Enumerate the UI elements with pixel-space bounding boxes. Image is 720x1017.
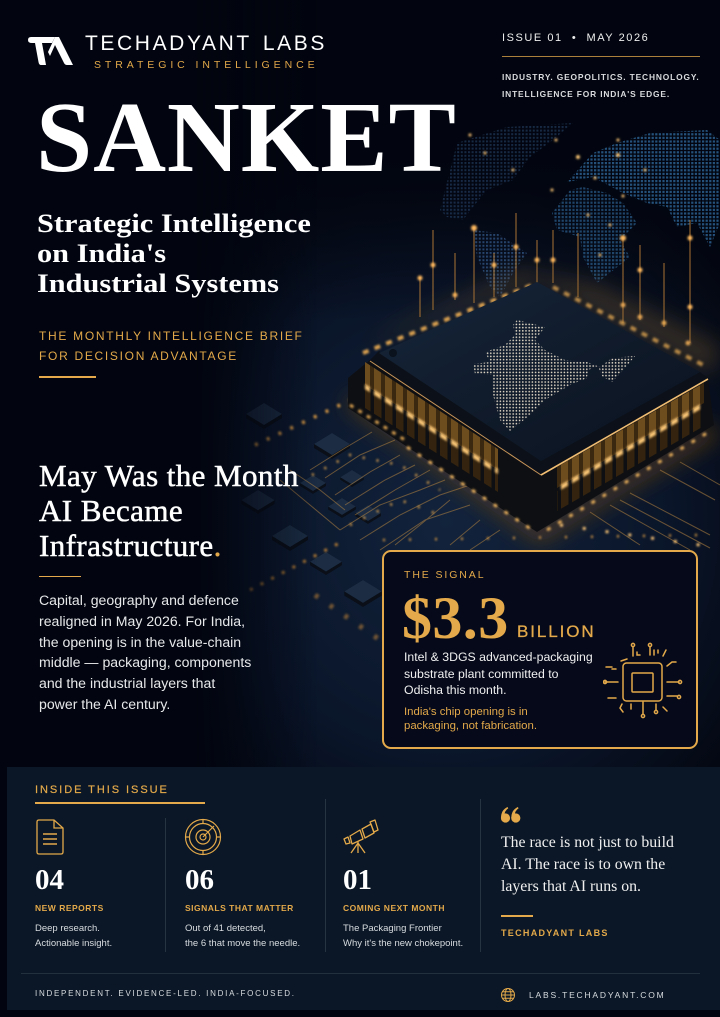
signal takeaway	[404, 706, 537, 732]
intro paragraph: middle — packaging, components	[39, 654, 251, 670]
signal description: substrate plant committed to	[404, 667, 558, 681]
icon: radar	[184, 818, 222, 856]
quote text	[501, 834, 674, 895]
signal value: $3.3	[402, 585, 509, 651]
number: 04	[35, 864, 64, 896]
signal description	[404, 650, 593, 697]
signal takeaway: India's chip opening is in	[404, 706, 528, 718]
description	[343, 923, 463, 949]
left fade	[0, 0, 720, 767]
signal description: Intel & 3DGS advanced-packaging	[404, 650, 593, 664]
issue descriptor: INTELLIGENCE FOR INDIA'S EDGE.	[502, 89, 670, 99]
brand name: TECHADYANT LABS	[85, 32, 327, 55]
icon: document	[36, 819, 64, 855]
intro paragraph: the opening is in the value-chain	[39, 634, 241, 650]
description	[35, 923, 112, 949]
lower pad rows	[350, 405, 707, 533]
quote text: The race is not just to build	[501, 834, 674, 851]
India dot map	[473, 320, 635, 431]
stat: new reports	[35, 864, 112, 949]
description: Out of 41 detected,	[185, 923, 266, 934]
label: NEW REPORTS	[35, 903, 104, 913]
quote attribution: TECHADYANT LABS	[501, 928, 609, 938]
strapline: THE MONTHLY INTELLIGENCE BRIEF	[39, 329, 304, 343]
solder highlights on board	[250, 398, 700, 640]
lid	[370, 351, 708, 475]
signal unit: BILLION	[517, 622, 596, 641]
panel: the signal	[382, 550, 698, 749]
hero illustration: world map, chip and circuit board	[186, 123, 720, 1001]
quote text: layers that AI runs on.	[501, 878, 641, 895]
description: the 6 that move the needle.	[185, 938, 300, 949]
intro paragraph	[39, 592, 251, 712]
icon: telescope	[343, 819, 379, 854]
stat: signals that matter	[185, 864, 300, 949]
warm bokeh glow around chip	[350, 270, 720, 535]
description: The Packaging Frontier	[343, 923, 442, 934]
description: Actionable insight.	[35, 938, 112, 949]
strapline	[39, 329, 304, 363]
icon: quote mark	[500, 807, 520, 823]
description: Deep research.	[35, 923, 100, 934]
strapline: FOR DECISION ADVANTAGE	[39, 349, 238, 363]
signal takeaway: packaging, not fabrication.	[404, 720, 537, 732]
glowing vertical signal beams	[418, 213, 692, 346]
pin columns	[365, 388, 704, 511]
description: Why it's the new chokepoint.	[343, 938, 463, 949]
label: SIGNALS THAT MATTER	[185, 903, 294, 913]
main headline: Infrastructure.	[39, 528, 222, 563]
circuit traces	[280, 432, 720, 550]
issue descriptor: INDUSTRY. GEOPOLITICS. TECHNOLOGY.	[502, 72, 700, 82]
intro paragraph: and the industrial layers that	[39, 675, 215, 691]
main headline: May Was the Month	[39, 458, 299, 493]
processor chip	[348, 282, 714, 533]
icon: chip	[603, 642, 682, 718]
label: COMING NEXT MONTH	[343, 903, 445, 913]
package body	[348, 360, 714, 532]
subtitle: Strategic Intelligence	[37, 208, 311, 238]
footer tagline: INDEPENDENT. EVIDENCE-LED. INDIA-FOCUSED.	[35, 989, 296, 998]
number: 06	[185, 864, 214, 896]
main headline	[39, 458, 299, 563]
outer pads	[363, 283, 707, 367]
logo mark	[28, 37, 73, 65]
section heading: INSIDE THIS ISSUE	[35, 784, 169, 796]
panel: inside this issue	[7, 767, 720, 1010]
issue descriptor	[502, 72, 700, 99]
icon: globe	[501, 988, 515, 1002]
description	[185, 923, 300, 949]
stat: coming next month	[343, 864, 463, 949]
signal description: Odisha this month.	[404, 683, 507, 697]
masthead title: SANKET	[36, 81, 457, 193]
intro paragraph: power the AI century.	[39, 696, 170, 712]
world map	[440, 123, 720, 297]
issue line: ISSUE 01 • MAY 2026	[502, 32, 649, 44]
glowing pin tops	[365, 384, 704, 492]
intro paragraph: realigned in May 2026. For India,	[39, 613, 245, 629]
subtitle: Industrial Systems	[37, 268, 279, 298]
intro paragraph: Capital, geography and defence	[39, 592, 239, 608]
footer website: LABS.TECHADYANT.COM	[529, 990, 666, 1000]
subtitle: on India's	[37, 238, 166, 268]
reflective wall under lid	[365, 362, 704, 488]
quote text: AI. The race is to own the	[501, 856, 665, 873]
brand tagline: STRATEGIC INTELLIGENCE	[94, 59, 319, 71]
subtitle	[37, 208, 311, 298]
signal label: THE SIGNAL	[404, 569, 485, 581]
number: 01	[343, 864, 372, 896]
main headline: AI Became	[39, 493, 183, 528]
circuit board components	[241, 403, 382, 607]
